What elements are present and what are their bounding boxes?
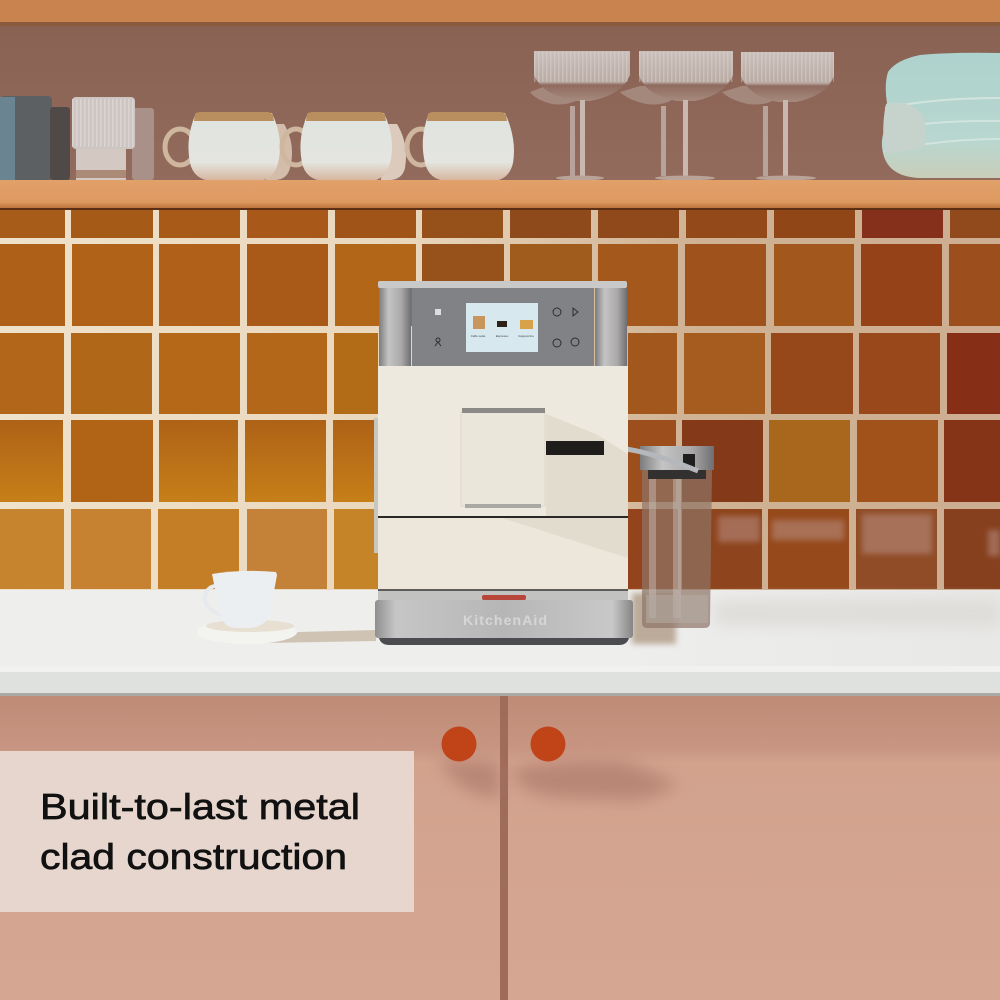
touch screen xyxy=(466,303,538,352)
touch screen: Caffe Latte xyxy=(471,334,486,338)
cream mug 2 xyxy=(282,112,406,181)
stoneware mugs and ribbed glasses, left xyxy=(0,96,154,181)
counter shadows xyxy=(266,593,1000,644)
lower gap xyxy=(378,516,628,518)
coffee machine xyxy=(374,281,633,645)
cream upper body xyxy=(378,366,628,516)
top cap xyxy=(378,281,627,288)
cream mug 3 xyxy=(407,112,514,181)
milk tube xyxy=(604,447,698,471)
ribbed coupe glasses xyxy=(530,51,834,180)
cabinet knobs xyxy=(440,726,678,800)
caption panel xyxy=(0,751,414,912)
wall behind shelf xyxy=(0,26,1000,181)
coffee spout block xyxy=(461,408,545,508)
caption text: Built-to-last metal xyxy=(40,786,360,827)
milk container xyxy=(640,446,714,628)
brand logo: KitchenAid xyxy=(463,612,547,628)
cream lower body xyxy=(378,518,628,590)
cabinet doors xyxy=(0,696,1000,1000)
touch screen: Cappuccino xyxy=(518,334,534,338)
side steel trims xyxy=(379,288,627,366)
espresso cup on saucer xyxy=(197,571,297,644)
cream mug 1 xyxy=(165,112,292,181)
touch screen: Espresso xyxy=(496,334,509,338)
control panel xyxy=(412,288,594,366)
panel buttons xyxy=(435,308,579,347)
upper wooden shelf xyxy=(0,0,1000,26)
tiled backsplash xyxy=(0,210,1000,592)
body shadow xyxy=(546,414,628,516)
water tank handle xyxy=(374,418,378,553)
countertop xyxy=(0,590,1000,696)
steel base xyxy=(375,589,633,645)
stacked mint bowls xyxy=(882,53,1000,178)
long wooden shelf xyxy=(0,180,1000,210)
black milk connector xyxy=(546,441,604,455)
caption text: clad construction xyxy=(40,836,347,877)
